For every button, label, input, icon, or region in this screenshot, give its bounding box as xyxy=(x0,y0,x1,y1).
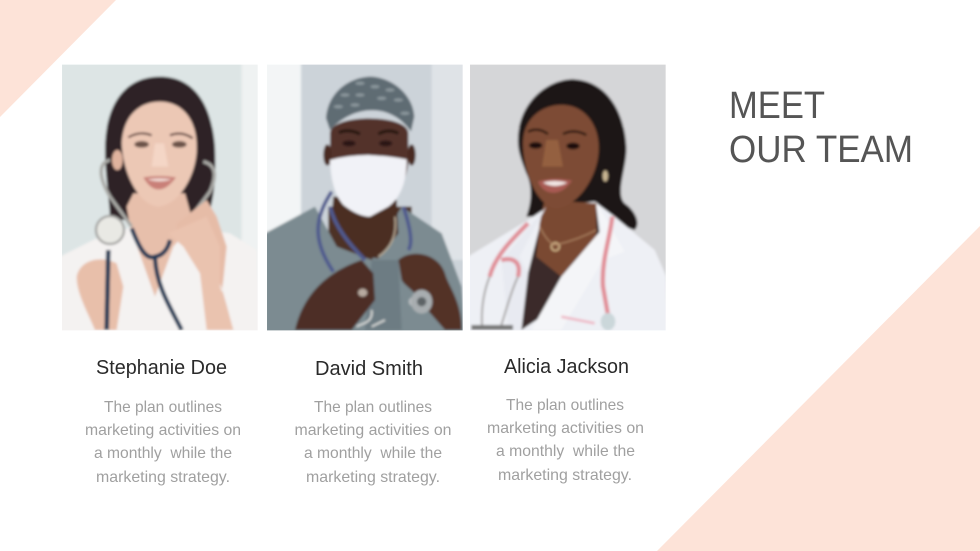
decorative triangle bottom right xyxy=(657,226,980,551)
heading: MEET xyxy=(729,85,825,127)
heading xyxy=(729,85,913,171)
name: Stephanie Doe: Stephanie Doe xyxy=(96,357,227,379)
bio: David Smith xyxy=(294,399,452,486)
bio: Stephanie Doe xyxy=(85,399,241,486)
bio: Stephanie Doe: The plan outlines xyxy=(104,399,222,416)
bio: Alicia Jackson: marketing activities on xyxy=(487,420,644,437)
bio: Stephanie Doe: marketing strategy. xyxy=(96,469,230,486)
bio: Stephanie Doe: marketing activities on xyxy=(85,422,241,439)
name: David Smith: David Smith xyxy=(315,358,423,380)
heading: OUR TEAM xyxy=(729,129,913,171)
bio: David Smith: a monthly while the xyxy=(304,445,442,462)
bio: David Smith: The plan outlines xyxy=(314,399,432,416)
bio: Alicia Jackson xyxy=(487,397,644,484)
photo: Alicia Jackson xyxy=(468,60,668,333)
photo: David Smith xyxy=(265,60,465,333)
decorative triangle top left xyxy=(0,0,116,117)
bio: David Smith: marketing activities on xyxy=(294,422,452,439)
photo: Stephanie Doe xyxy=(60,60,262,333)
bio: Alicia Jackson: a monthly while the xyxy=(496,443,635,460)
name: Alicia Jackson: Alicia Jackson xyxy=(504,356,629,378)
bio: David Smith: marketing strategy. xyxy=(306,469,440,486)
bio: Alicia Jackson: The plan outlines xyxy=(506,397,624,414)
bio: Stephanie Doe: a monthly while the xyxy=(94,445,232,462)
bio: Alicia Jackson: marketing strategy. xyxy=(498,467,632,484)
